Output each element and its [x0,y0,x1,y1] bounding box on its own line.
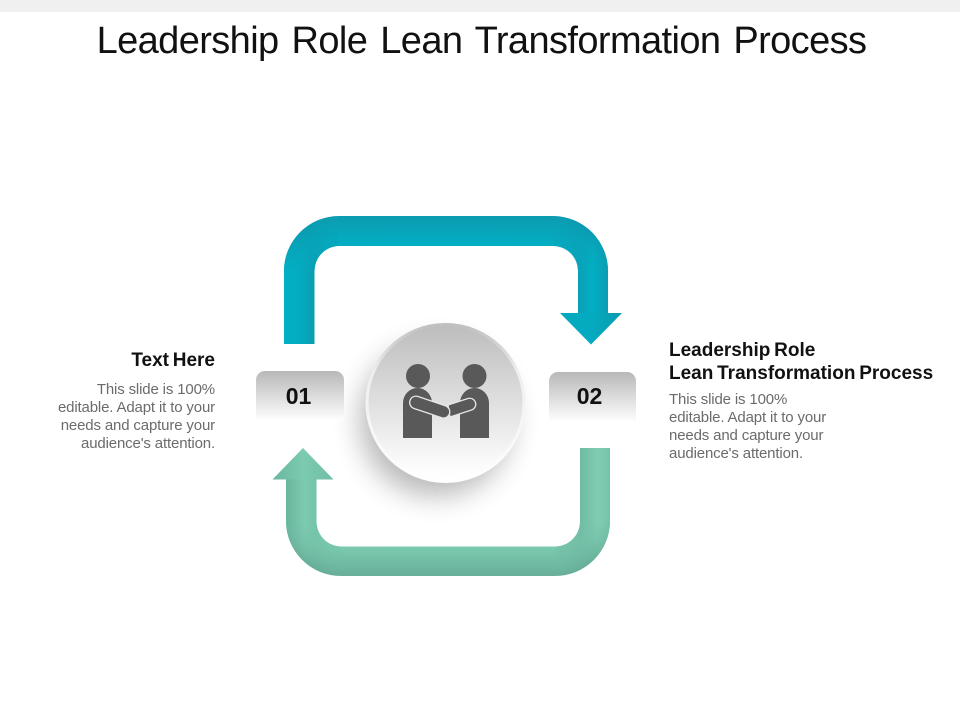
number badge 02: 02 [577,383,602,409]
title: Leadership Role Lean Transformation Process [97,20,866,62]
bottom green arrow [272,448,610,576]
right body text: audience's attention. [669,445,803,462]
icon: handshake [403,364,489,438]
right body text: needs and capture your [669,427,823,444]
top teal arrow [284,216,622,344]
right body text [669,391,826,462]
right heading: Lean Transformation Process [669,363,933,384]
diagram [272,216,622,576]
left heading: Text Here [131,350,215,371]
right heading [669,340,933,384]
left body text [58,381,215,452]
right body text: This slide is 100% [669,391,787,408]
number badge 02 [549,372,636,422]
left body text: needs and capture your [61,417,215,434]
top strip [0,0,960,12]
number badge 01: 01 [286,383,311,409]
left body text: audience's attention. [81,435,215,452]
central disc with shadow [360,323,526,496]
number badge 01 [256,371,344,421]
right body text: editable. Adapt it to your [669,409,826,426]
right heading: Leadership Role [669,340,815,361]
left body text: This slide is 100% [97,381,215,398]
left body text: editable. Adapt it to your [58,399,215,416]
